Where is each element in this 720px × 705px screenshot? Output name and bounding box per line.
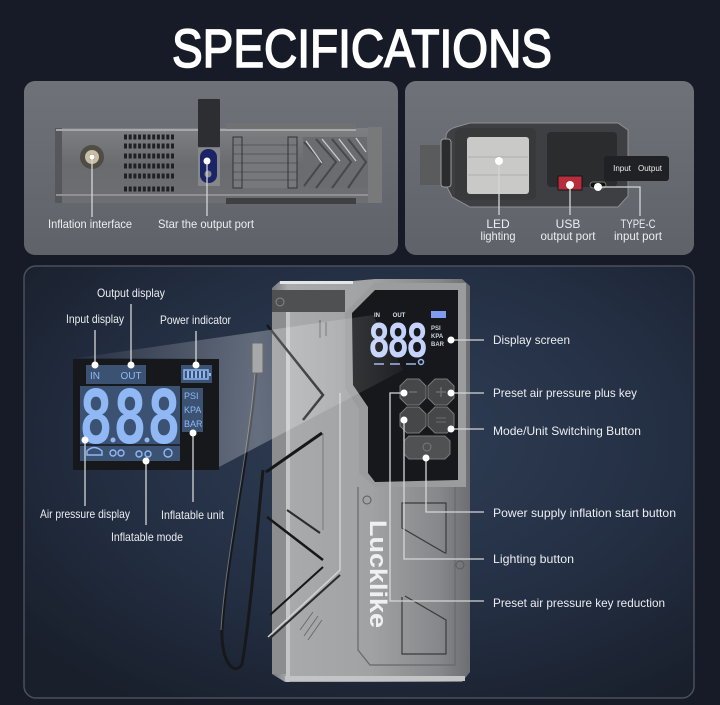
callout: output display	[97, 286, 165, 368]
projection beam	[77, 315, 403, 467]
chevron panel	[303, 137, 367, 188]
unit block: KPA	[184, 405, 201, 415]
vent grille	[124, 137, 174, 189]
button: mode	[428, 407, 454, 433]
screen readout: OUT	[393, 313, 406, 319]
callout: display screen	[448, 333, 570, 347]
digit block: 8	[147, 375, 181, 461]
callout: mode button: Mode/Unit Switching Button	[493, 424, 641, 438]
title: SPECIFICATIONS	[172, 19, 552, 79]
digit block: 8	[79, 375, 113, 461]
callout: inflatable unit	[161, 430, 225, 522]
output port	[198, 148, 220, 186]
callout: input display	[66, 312, 124, 368]
control buttons	[400, 379, 454, 459]
panel: side view	[24, 81, 398, 255]
brand logo: Lucklike	[364, 520, 391, 628]
callout: air pressure display: Air pressure display	[40, 507, 130, 521]
callout: output display: Output display	[97, 286, 165, 300]
screen readout: 8	[406, 314, 428, 368]
battery indicator	[181, 365, 212, 383]
callout: LED lighting	[480, 157, 516, 243]
inflation port	[80, 145, 104, 169]
callout: power indicator	[160, 313, 231, 368]
callout: USB output port	[540, 181, 596, 243]
slot panel	[233, 137, 297, 188]
callout: USB output port: output port	[540, 229, 596, 243]
screen readout: 8	[368, 314, 390, 368]
dark screen	[352, 290, 458, 482]
button: power	[404, 436, 450, 459]
callout: star the output port	[158, 158, 255, 231]
screen readout: PSI	[431, 326, 441, 332]
port tag	[198, 99, 220, 147]
port tag: Output	[638, 164, 663, 173]
callout: plus key: Preset air pressure plus key	[493, 386, 637, 400]
callout: lighting button: Lighting button	[493, 552, 574, 566]
USB port	[558, 176, 582, 190]
in/out indicator	[86, 365, 146, 384]
unit block: BAR	[184, 419, 203, 429]
callout: TYPE-C input port: TYPE-C	[620, 217, 656, 231]
screen readout: 8	[387, 314, 409, 368]
callout: power button	[422, 454, 676, 520]
LED lamp	[467, 137, 529, 194]
button: plus	[428, 379, 454, 405]
callout: power button: Power supply inflation start button	[493, 506, 676, 520]
screen readout: BAR	[431, 342, 445, 348]
type-c port	[590, 182, 606, 188]
callout: star the output port: Star the output port	[158, 217, 255, 231]
unit block	[182, 388, 203, 432]
port tag	[604, 156, 669, 181]
device front	[266, 279, 470, 682]
callout: inflation interface: Inflation interface	[48, 217, 132, 231]
callout: inflatable unit: Inflatable unit	[161, 508, 225, 522]
screen readout: KPA	[431, 334, 444, 340]
in/out indicator: OUT	[120, 371, 142, 382]
callout: inflatable mode: Inflatable mode	[111, 530, 183, 544]
button: light	[400, 407, 426, 433]
wrist strap	[221, 343, 263, 669]
callout: USB output port: USB	[556, 217, 580, 231]
callout: power indicator: Power indicator	[160, 313, 231, 327]
callout: reduction key	[390, 390, 665, 610]
callout: TYPE-C input port	[594, 183, 663, 243]
callout: TYPE-C input port: input port	[614, 229, 663, 243]
device end body	[441, 123, 628, 207]
button: minus	[400, 379, 426, 405]
speaker mesh	[547, 132, 617, 187]
callout: display screen: Display screen	[493, 333, 570, 347]
mode icons	[87, 448, 172, 457]
callout: lighting button	[400, 416, 574, 566]
screen readout: IN	[374, 313, 380, 319]
callout: LED lighting: lighting	[480, 229, 516, 243]
port tag: Input	[613, 164, 632, 173]
screen readout	[368, 311, 446, 368]
in/out indicator: IN	[90, 371, 100, 382]
screen bezel	[345, 283, 466, 487]
callout: inflation interface	[48, 154, 132, 231]
digit block	[79, 375, 181, 461]
digit block: 8	[113, 375, 147, 461]
LCD enlarged display	[73, 359, 219, 470]
strap	[420, 145, 442, 185]
callout: LED lighting: LED	[486, 217, 510, 231]
callout: air pressure display	[40, 436, 130, 521]
callout: reduction key: Preset air pressure key reduction	[493, 596, 665, 610]
unit block: PSI	[184, 391, 199, 401]
device side body	[55, 123, 382, 204]
callout: input display: Input display	[66, 312, 124, 326]
body grooves	[266, 320, 464, 665]
callout: inflatable mode	[111, 458, 183, 544]
panel: end view	[405, 81, 694, 255]
panel: main view	[24, 266, 694, 698]
